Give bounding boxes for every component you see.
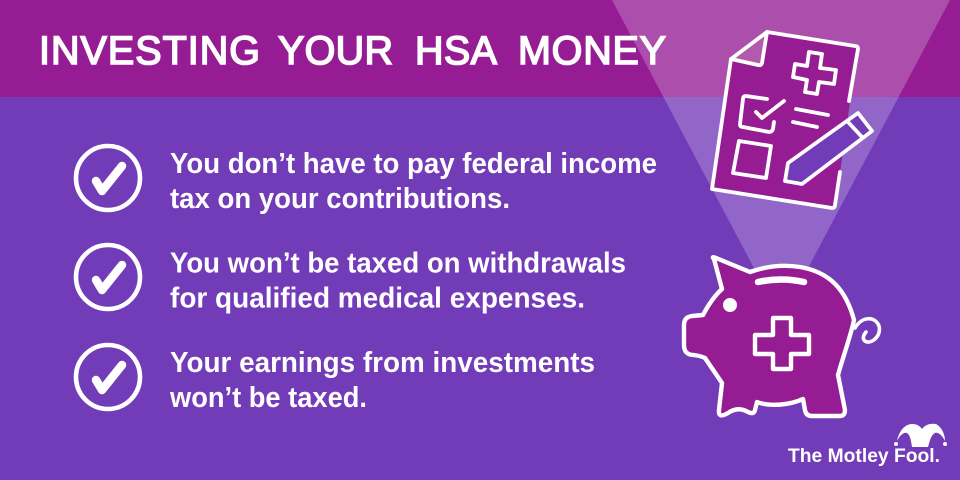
empty box (733, 141, 771, 178)
title: INVESTING (39, 29, 260, 73)
pencil (785, 113, 872, 184)
bullet text 2 (170, 248, 626, 314)
bullet 1 (76, 146, 657, 215)
title (39, 29, 666, 73)
bullet text 1: tax on your contributions. (170, 183, 510, 215)
bullet text 1: You don’t have to pay federal income (170, 148, 657, 180)
bullet text 3 (169, 347, 595, 414)
icon: check circle 1 (76, 146, 140, 210)
bullet 2 (76, 245, 626, 314)
cross on pig (755, 318, 809, 369)
bullet text 2: You won’t be taxed on withdrawals (170, 248, 626, 280)
icon: medical document with pencil (712, 32, 872, 208)
cross on document (793, 52, 836, 94)
logo wordmark: The Motley Fool. (788, 445, 940, 467)
pig eye (725, 300, 735, 310)
title: MONEY (518, 29, 666, 73)
icon: jester hat (894, 424, 947, 447)
icon: check circle 3 (76, 345, 140, 409)
icon: check circle 2 (76, 245, 140, 309)
light beam (612, 0, 950, 270)
bullet text 3: won’t be taxed. (169, 382, 367, 414)
checked box (740, 96, 774, 132)
bullet text 2: for qualified medical expenses. (170, 282, 585, 314)
pig tail (855, 319, 879, 342)
text lines (793, 109, 828, 127)
header band (0, 0, 960, 97)
title: HSA (415, 29, 498, 73)
bullet text 3: Your earnings from investments (170, 347, 595, 379)
logo: The Motley Fool (788, 424, 947, 467)
coin slot (758, 280, 804, 282)
bullet 3 (76, 345, 595, 414)
title: YOUR (278, 29, 393, 73)
bullet text 1 (170, 148, 657, 215)
icon: piggy bank (684, 257, 879, 416)
